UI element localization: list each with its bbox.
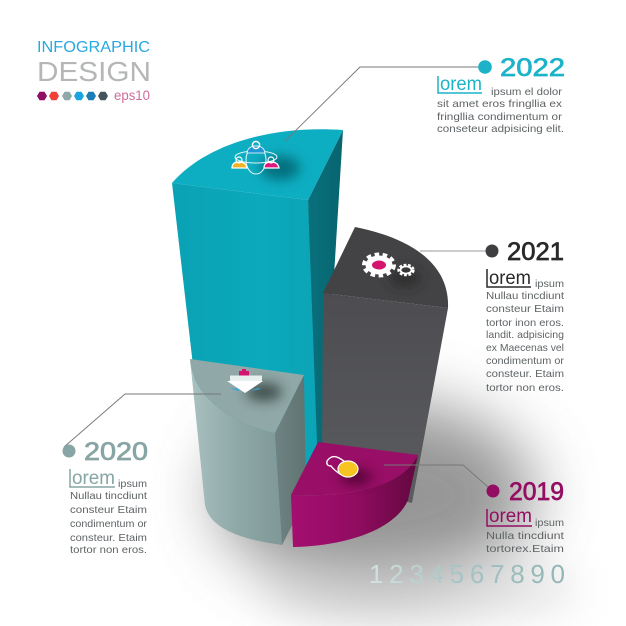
lorem 2019: orem xyxy=(489,506,532,527)
body text 2021: landit. adpisicing xyxy=(486,329,564,341)
dot 2019 xyxy=(486,484,500,498)
body text 2020: Nullau tincdiunt xyxy=(70,490,147,502)
title: infographic: INFOGRAPHIC xyxy=(37,39,150,56)
body text 2019: Nulla tincdiunt xyxy=(486,530,564,542)
body text 2021: tortor non eros. xyxy=(486,382,564,394)
body text 2021 xyxy=(486,278,565,394)
body text 2020: consteur Etaim xyxy=(70,504,147,516)
body text 2021: Nullau tincdiunt xyxy=(486,290,564,302)
body text 2021: consteur Etaim xyxy=(486,303,564,315)
year 2019: 2019 xyxy=(509,478,564,506)
magenta bar front face xyxy=(291,455,418,547)
leader line: 2019 xyxy=(384,465,488,487)
text block: 2019 xyxy=(486,478,564,555)
lorem 2021: orem xyxy=(489,268,531,289)
body text 2021: ex Maecenas vel xyxy=(486,342,564,354)
body text 2021: ipsum xyxy=(535,278,564,290)
body text 2020: consteur. Etaim xyxy=(70,532,147,544)
panel: 2022 teal bar xyxy=(172,129,343,470)
eps10 label: eps10 xyxy=(114,88,150,103)
body text 2022: conseteur adpisicing elit. xyxy=(437,123,564,135)
text block: 2020 xyxy=(62,438,148,556)
year 2021: 2021 xyxy=(507,238,564,266)
body text 2020 xyxy=(70,478,148,556)
leader line: 2021 xyxy=(420,250,486,252)
panel: 2020 gray bar xyxy=(190,359,306,545)
teal bar front face xyxy=(172,183,322,470)
leader line: 2020 xyxy=(64,394,221,447)
icon: people network xyxy=(232,141,300,180)
body text 2021: consteur. Etaim xyxy=(486,368,564,380)
panel: 2019 magenta bar xyxy=(291,442,418,547)
body text 2022 xyxy=(437,86,564,135)
title block xyxy=(37,39,151,103)
icon: ship xyxy=(227,369,282,401)
gray bar top face xyxy=(190,359,304,433)
dot 2020 xyxy=(62,444,76,458)
lorem 2022: orem xyxy=(440,74,482,95)
text block: 2021 xyxy=(486,238,565,394)
body text 2022: sit amet eros fringllia ex xyxy=(437,98,563,110)
body text 2020: tortor non eros. xyxy=(70,544,147,556)
year 2022: 2022 xyxy=(500,54,565,82)
leader line: 2022 xyxy=(285,67,479,141)
body text 2020: ipsum xyxy=(118,478,147,490)
dark bar top face xyxy=(323,227,448,308)
lorem 2020: orem xyxy=(72,468,115,489)
body text 2019 xyxy=(486,517,564,555)
number row: 1234567890 xyxy=(369,559,565,589)
text block: 2022 xyxy=(437,54,565,135)
background floor shadow xyxy=(215,400,580,625)
dot 2021 xyxy=(486,244,498,258)
icon: gears xyxy=(364,254,421,287)
teal bar top face xyxy=(172,129,343,200)
gray bar side face xyxy=(275,375,306,545)
body text 2021: tortor inon eros. xyxy=(486,317,564,329)
dot 2022 xyxy=(478,60,492,74)
dark bar front face xyxy=(322,293,448,503)
colour hexagons xyxy=(37,92,108,100)
gray bar front face xyxy=(190,359,282,545)
body text 2020: condimentum or xyxy=(70,518,148,530)
body text 2019: ipsum xyxy=(535,517,564,529)
body text 2022: fringllia condimentum or xyxy=(437,111,563,123)
icon: money bag with coin xyxy=(327,457,372,484)
body text 2022: ipsum el dolor xyxy=(491,86,563,98)
magenta bar top face xyxy=(291,442,418,495)
panel: 2021 dark bar xyxy=(322,227,448,503)
title: design: DESIGN xyxy=(37,56,151,87)
teal bar side face xyxy=(308,130,343,470)
year 2020: 2020 xyxy=(84,438,148,466)
body text 2019: tortorex.Etaim xyxy=(486,543,564,555)
body text 2021: condimentum or xyxy=(486,355,565,367)
